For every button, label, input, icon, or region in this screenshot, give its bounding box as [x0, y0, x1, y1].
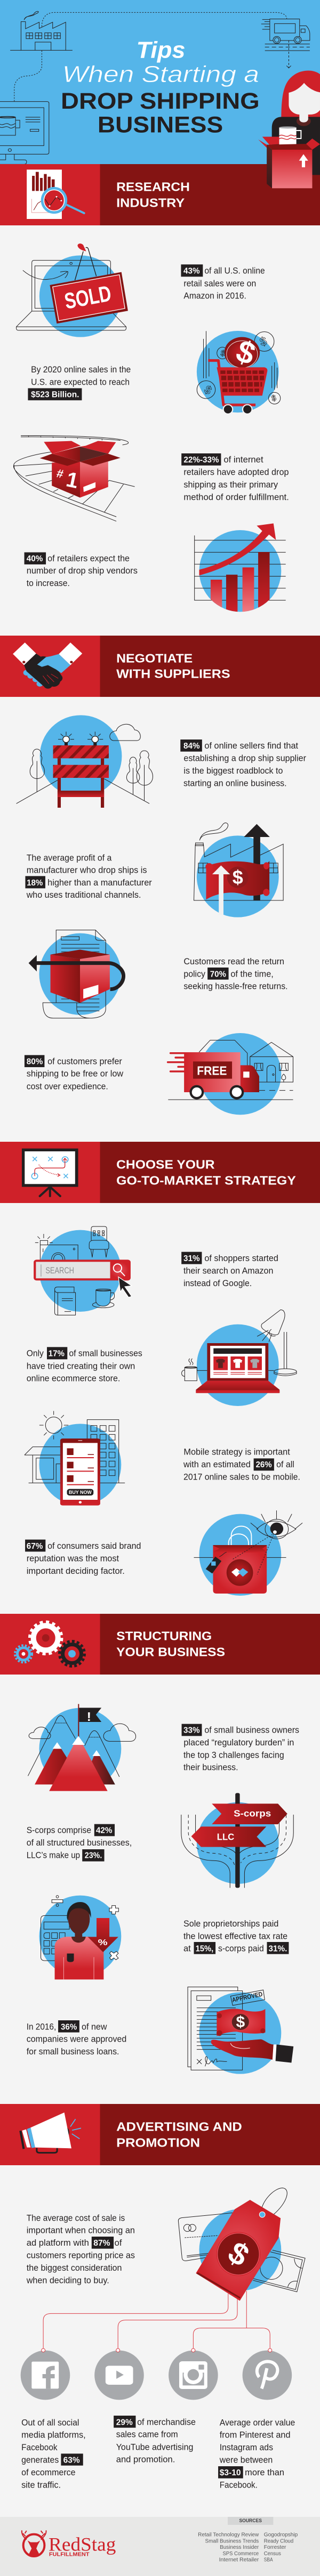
stat: facebook 63%: 63% [63, 2455, 80, 2465]
stat: pinterest and instagram $3-10: Average order value [220, 2417, 295, 2427]
title: When Starting a [62, 61, 259, 87]
stat: 26%: Mobile strategy is important [183, 1447, 290, 1457]
stat: 36%: In 2016, [27, 2021, 56, 2031]
stat: 80%: shipping to be free or low [27, 1069, 123, 1078]
stat: $523 billion: U.S. are expected to reach [31, 377, 130, 387]
sources list: SPS Commerce [222, 2551, 259, 2557]
stat: 18%: who uses traditional channels. [26, 890, 141, 900]
stat: 87%: important when choosing an [27, 2225, 135, 2235]
stat: 87%: 87% [93, 2238, 110, 2248]
icon: free shipping truck [168, 1033, 293, 1115]
stat: $523 billion [28, 364, 131, 400]
stat: pinterest and instagram $3-10: $3-10 [220, 2467, 241, 2477]
stat: 67%: important deciding factor. [27, 1566, 125, 1576]
icon: woman with mug and box [258, 70, 320, 188]
heading [116, 652, 230, 681]
stat: 80%: cost over expedience. [27, 1081, 108, 1091]
stat: pinterest and instagram $3-10: Instagram ads [220, 2442, 273, 2452]
stat: 87%: ad platform with [27, 2238, 89, 2248]
section: structure stats [27, 1704, 299, 2074]
sources list: Census [264, 2551, 281, 2557]
stat: 33%: of small business owners [204, 1725, 299, 1735]
stat: facebook 63%: Facebook [21, 2442, 58, 2452]
stat: 22%-33%: of internet [223, 454, 263, 465]
icon: search bar with products: SEARCH [45, 1265, 74, 1275]
stat: 26%: 26% [255, 1459, 272, 1469]
stat: 31%: of shoppers started [204, 1253, 278, 1263]
stat: 80%: 80% [27, 1056, 43, 1066]
stat: 18%: The average profit of a [27, 852, 111, 863]
section header: structuring your business [0, 1614, 320, 1675]
icon: approved loan: $ [236, 2013, 245, 2031]
icon: laptop online store [182, 1310, 297, 1406]
stat: 70%: 70% [210, 969, 226, 979]
icon: shopping cart with coins: $ [258, 334, 268, 348]
stat: 67% [25, 1540, 141, 1576]
icon: shopping bag and eye [194, 1510, 302, 1596]
section header: choose your go-to-market strategy [0, 1142, 320, 1203]
icon: #1 box on road: 1 [64, 468, 81, 493]
stat: 87%: customers reporting price as [27, 2250, 135, 2260]
stat: 40%: to increase. [27, 578, 70, 588]
title: DROP SHIPPING [61, 88, 260, 113]
stat: 17%: 17% [49, 1348, 65, 1358]
stat: youtube 29%: YouTube advertising [116, 2442, 193, 2452]
stat: 87% [26, 2213, 135, 2285]
stat: 18%: higher than a manufacturer [47, 877, 152, 888]
stat: facebook 63%: generates [21, 2455, 59, 2465]
icon: price tag with card and bill [178, 2188, 305, 2301]
stat: 36%: 36% [61, 2021, 77, 2031]
stat: 43% on Amazon: Amazon in 2016. [183, 291, 246, 300]
sources list: Forrester [264, 2545, 286, 2550]
stat: 17% [27, 1347, 142, 1383]
heading: NEGOTIATE [116, 652, 193, 665]
stat: 15% vs 31%: the lowest effective tax rate [183, 1931, 287, 1941]
icon: pinterest [243, 2349, 292, 2400]
sources list: SOURCES [239, 2518, 262, 2524]
stat: 18% [25, 852, 152, 900]
stat: facebook 63%: Out of all social [21, 2417, 79, 2427]
stat: 22%-33%: 22%-33% [183, 454, 219, 465]
stat: 43% on Amazon: retail sales were on [183, 278, 256, 288]
stat: 26%: of all [276, 1459, 294, 1469]
stat: $523 billion: By 2020 online sales in the [31, 364, 131, 375]
stat: 84%: starting an online business. [183, 778, 287, 788]
title: Tips [137, 37, 185, 63]
icon: monitor [0, 102, 49, 164]
icon: return box with document [29, 930, 124, 1018]
stat: facebook 63% [21, 2417, 86, 2490]
stat: facebook 63%: media platforms, [21, 2430, 86, 2440]
icon: signpost with roads [181, 1793, 293, 1888]
sources list: Gogodropship [264, 2532, 298, 2538]
stat: youtube 29%: of merchandise [137, 2417, 196, 2427]
heading: INDUSTRY [116, 197, 185, 210]
stat: 67%: of consumers said brand [47, 1541, 141, 1551]
stat: pinterest and instagram $3-10: Facebook. [220, 2480, 258, 2490]
icon: tax person with calculator [39, 1896, 121, 1979]
stat: 33%: placed “regulatory burden” in [183, 1737, 294, 1748]
stat: pinterest and instagram $3-10: from Pinterest and [220, 2430, 291, 2440]
section: strategy stats [25, 1226, 302, 1596]
logo: RedStag Fulfillment: FULFILLMENT [49, 2551, 90, 2557]
stat: 26%: with an estimated [183, 1459, 251, 1469]
icon: mountains with flag: ! [87, 1710, 91, 1724]
stat: 40% [25, 552, 138, 588]
stat: 87%: when deciding to buy. [26, 2275, 109, 2285]
icon: shopping cart with coins [197, 331, 281, 415]
sources list: Small Business Trends [205, 2538, 259, 2544]
stat: 43% on Amazon [181, 264, 265, 300]
stat: 36%: companies were approved [27, 2034, 126, 2044]
stat: 67%: 67% [27, 1541, 43, 1551]
sources list: Ready Cloud [264, 2538, 293, 2544]
stat: youtube 29%: and promotion. [116, 2455, 175, 2464]
stat: 17%: online ecommerce store. [27, 1374, 120, 1383]
stat: 67%: reputation was the most [27, 1554, 119, 1563]
heading [116, 1630, 225, 1659]
icon: shopping cart with coins: $ [220, 348, 226, 359]
stat: 17%: have tried creating their own [27, 1361, 135, 1371]
stat: 15% vs 31%: 31%. [269, 1944, 287, 1953]
stat: 33% [182, 1724, 299, 1772]
icon: report with magnifier [27, 169, 84, 219]
panel: hero [0, 0, 320, 165]
heading: CHOOSE YOUR [116, 1158, 215, 1172]
icon: strategy board [22, 1149, 78, 1196]
section header: research industry [0, 164, 320, 225]
stat: 15% vs 31%: 15%, [196, 1944, 213, 1953]
icon: signpost with roads: S-corps [234, 1808, 271, 1819]
stat: 42% and 23%: of all structured businesses, [27, 1838, 132, 1848]
icon: shopping cart with coins: $ [270, 393, 277, 403]
heading: YOUR BUSINESS [116, 1646, 225, 1659]
stat: facebook 63%: site traffic. [21, 2480, 61, 2490]
heading: PROMOTION [116, 2136, 200, 2150]
stat: 70% [183, 956, 288, 991]
stat: 80%: of customers prefer [47, 1056, 122, 1066]
icon: approved loan [188, 1987, 293, 2074]
icon: price tag with card and bill: $ [222, 2234, 255, 2273]
stat: youtube 29%: sales came from [116, 2429, 178, 2439]
stat: 31%: instead of Google. [183, 1278, 252, 1288]
heading: RESEARCH [116, 181, 190, 194]
stat: 84%: is the biggest roadblock to [183, 766, 283, 776]
heading: WITH SUPPLIERS [116, 668, 230, 681]
stat: 70%: policy [183, 969, 205, 979]
dashed route lines [14, 12, 289, 101]
stat: 84%: 84% [183, 741, 200, 751]
stat: 15% vs 31%: Sole proprietorships paid [183, 1919, 278, 1929]
stat: youtube 29% [114, 2416, 196, 2464]
stat: 84% [180, 740, 306, 788]
sources list: Internet Retailer [219, 2557, 259, 2563]
stat: 36%: of new [82, 2021, 107, 2031]
stat: 80% [25, 1055, 123, 1091]
icon: approved loan: APPROVED [231, 1990, 263, 2004]
stat: youtube 29%: 29% [116, 2417, 133, 2427]
icon: shopping cart with coins: $ [231, 334, 260, 372]
icon: tax person with calculator: % [98, 1938, 108, 1947]
icon: mobile shopping [25, 1411, 125, 1506]
title [61, 37, 260, 137]
icon: free shipping truck: FREE [197, 1064, 227, 1078]
heading [116, 1158, 296, 1188]
stat: pinterest and instagram $3-10: were between [219, 2455, 273, 2465]
stat: 26%: 2017 online sales to be mobile. [183, 1472, 300, 1482]
heading [116, 181, 190, 210]
logo: RedStag Fulfillment [22, 2530, 116, 2557]
stat: 70%: of the time, [230, 969, 274, 979]
stat: 42% and 23%: 23%. [85, 1850, 102, 1860]
stat: 22%-33%: retailers have adopted drop [183, 467, 289, 477]
stat: 87%: The average cost of sale is [27, 2213, 125, 2223]
stat: 17%: of small businesses [69, 1348, 142, 1358]
sources list [198, 2517, 298, 2563]
stat: 17%: Only [27, 1348, 44, 1358]
stat: 33%: the top 3 challenges facing [183, 1750, 284, 1760]
stat: 15% vs 31% [183, 1919, 289, 1954]
connector lines [43, 2291, 270, 2348]
stat: 42% and 23%: 42% [96, 1825, 112, 1835]
stat: 31% [181, 1252, 278, 1288]
section: negotiate stats [17, 715, 306, 1115]
heading: GO-TO-MARKET STRATEGY [116, 1174, 296, 1188]
icon: sold sign on laptop [17, 243, 128, 337]
icon: factory with profit [194, 823, 283, 917]
stat: 15% vs 31%: s-corps paid [218, 1944, 264, 1953]
icon: #1 box on road: # [55, 466, 65, 481]
stat: 31%: 31% [183, 1253, 200, 1263]
stat: 42% and 23%: S-corps comprise [27, 1825, 91, 1835]
stat: 31%: their search on Amazon [183, 1266, 273, 1275]
stat: 18%: 18% [27, 877, 43, 888]
stat: 33%: their business. [183, 1762, 238, 1772]
icon: search bar with products [34, 1226, 132, 1315]
stat: 43% on Amazon: 43% [183, 266, 200, 275]
icon: gears [15, 1622, 84, 1667]
stat: 40%: number of drop ship vendors [27, 566, 138, 575]
logo: RedStag Fulfillment: RedStag [49, 2534, 116, 2555]
heading: ADVERTISING AND [116, 2120, 242, 2134]
stat: 70%: Customers read the return [183, 956, 284, 966]
icon: factory [10, 11, 73, 50]
section: advertising stats [21, 2188, 305, 2490]
icon: factory with profit: $ [233, 866, 243, 888]
stat: 40%: of retailers expect the [47, 553, 130, 563]
stat: 33%: 33% [183, 1725, 200, 1735]
stat: 36%: for small business loans. [27, 2046, 119, 2057]
heading: STRUCTURING [116, 1630, 212, 1643]
stat: 42% and 23% [27, 1824, 132, 1862]
icon: sold sign on laptop: SOLD [62, 281, 113, 314]
stat: 36% [27, 2020, 126, 2057]
icon: mobile shopping: BUY NOW [69, 1490, 92, 1496]
title: BUSINESS [98, 111, 223, 137]
sources list: SBA [264, 2557, 273, 2563]
stat: pinterest and instagram $3-10 [218, 2417, 295, 2490]
icon: growth bar chart [195, 523, 286, 613]
icon: youtube [94, 2349, 144, 2400]
stat: 22%-33% [181, 453, 289, 502]
icon: facebook [21, 2349, 70, 2400]
stat: 87%: of [115, 2238, 122, 2248]
stat: $523 billion: $523 Billion. [31, 389, 79, 399]
stat: 87%: the biggest consideration [27, 2263, 122, 2273]
icon: road barrier [17, 715, 153, 808]
icon: #1 box on road [13, 435, 135, 521]
stat: 22%-33%: method of order fulfillment. [183, 492, 289, 502]
stat: pinterest and instagram $3-10: more than [245, 2467, 284, 2477]
icon: shopping cart with coins: $ [202, 383, 214, 397]
heading [116, 2120, 242, 2150]
icon: instagram [169, 2349, 218, 2400]
stat: 22%-33%: shipping as their primary [183, 480, 278, 490]
stat: 70%: seeking hassle-free returns. [183, 981, 288, 991]
sources list: Retail Technology Review [198, 2532, 259, 2538]
stat: 26% [183, 1447, 300, 1482]
stat: 84%: of online sellers find that [204, 741, 298, 751]
stat: 42% and 23%: LLC’s make up [27, 1850, 80, 1860]
icon: megaphone [20, 2112, 81, 2153]
sources list: Business Insider [220, 2545, 259, 2550]
panel: footer [0, 2517, 320, 2576]
stat: 43% on Amazon: of all U.S. online [204, 266, 265, 275]
stat: 40%: 40% [27, 553, 43, 563]
section header: advertising and promotion [0, 2104, 320, 2165]
icon: handshake [13, 643, 82, 689]
section header: negotiate with suppliers [0, 636, 320, 697]
stat: 15% vs 31%: at [183, 1944, 191, 1953]
icon: delivery truck [261, 19, 310, 68]
stat: facebook 63%: of ecommerce [21, 2467, 76, 2477]
section: research stats [13, 243, 289, 613]
icon: signpost with roads: LLC [217, 1832, 234, 1842]
stat: 18%: manufacturer who drop ships is [27, 865, 147, 875]
icon: mountains with flag [28, 1704, 136, 1791]
